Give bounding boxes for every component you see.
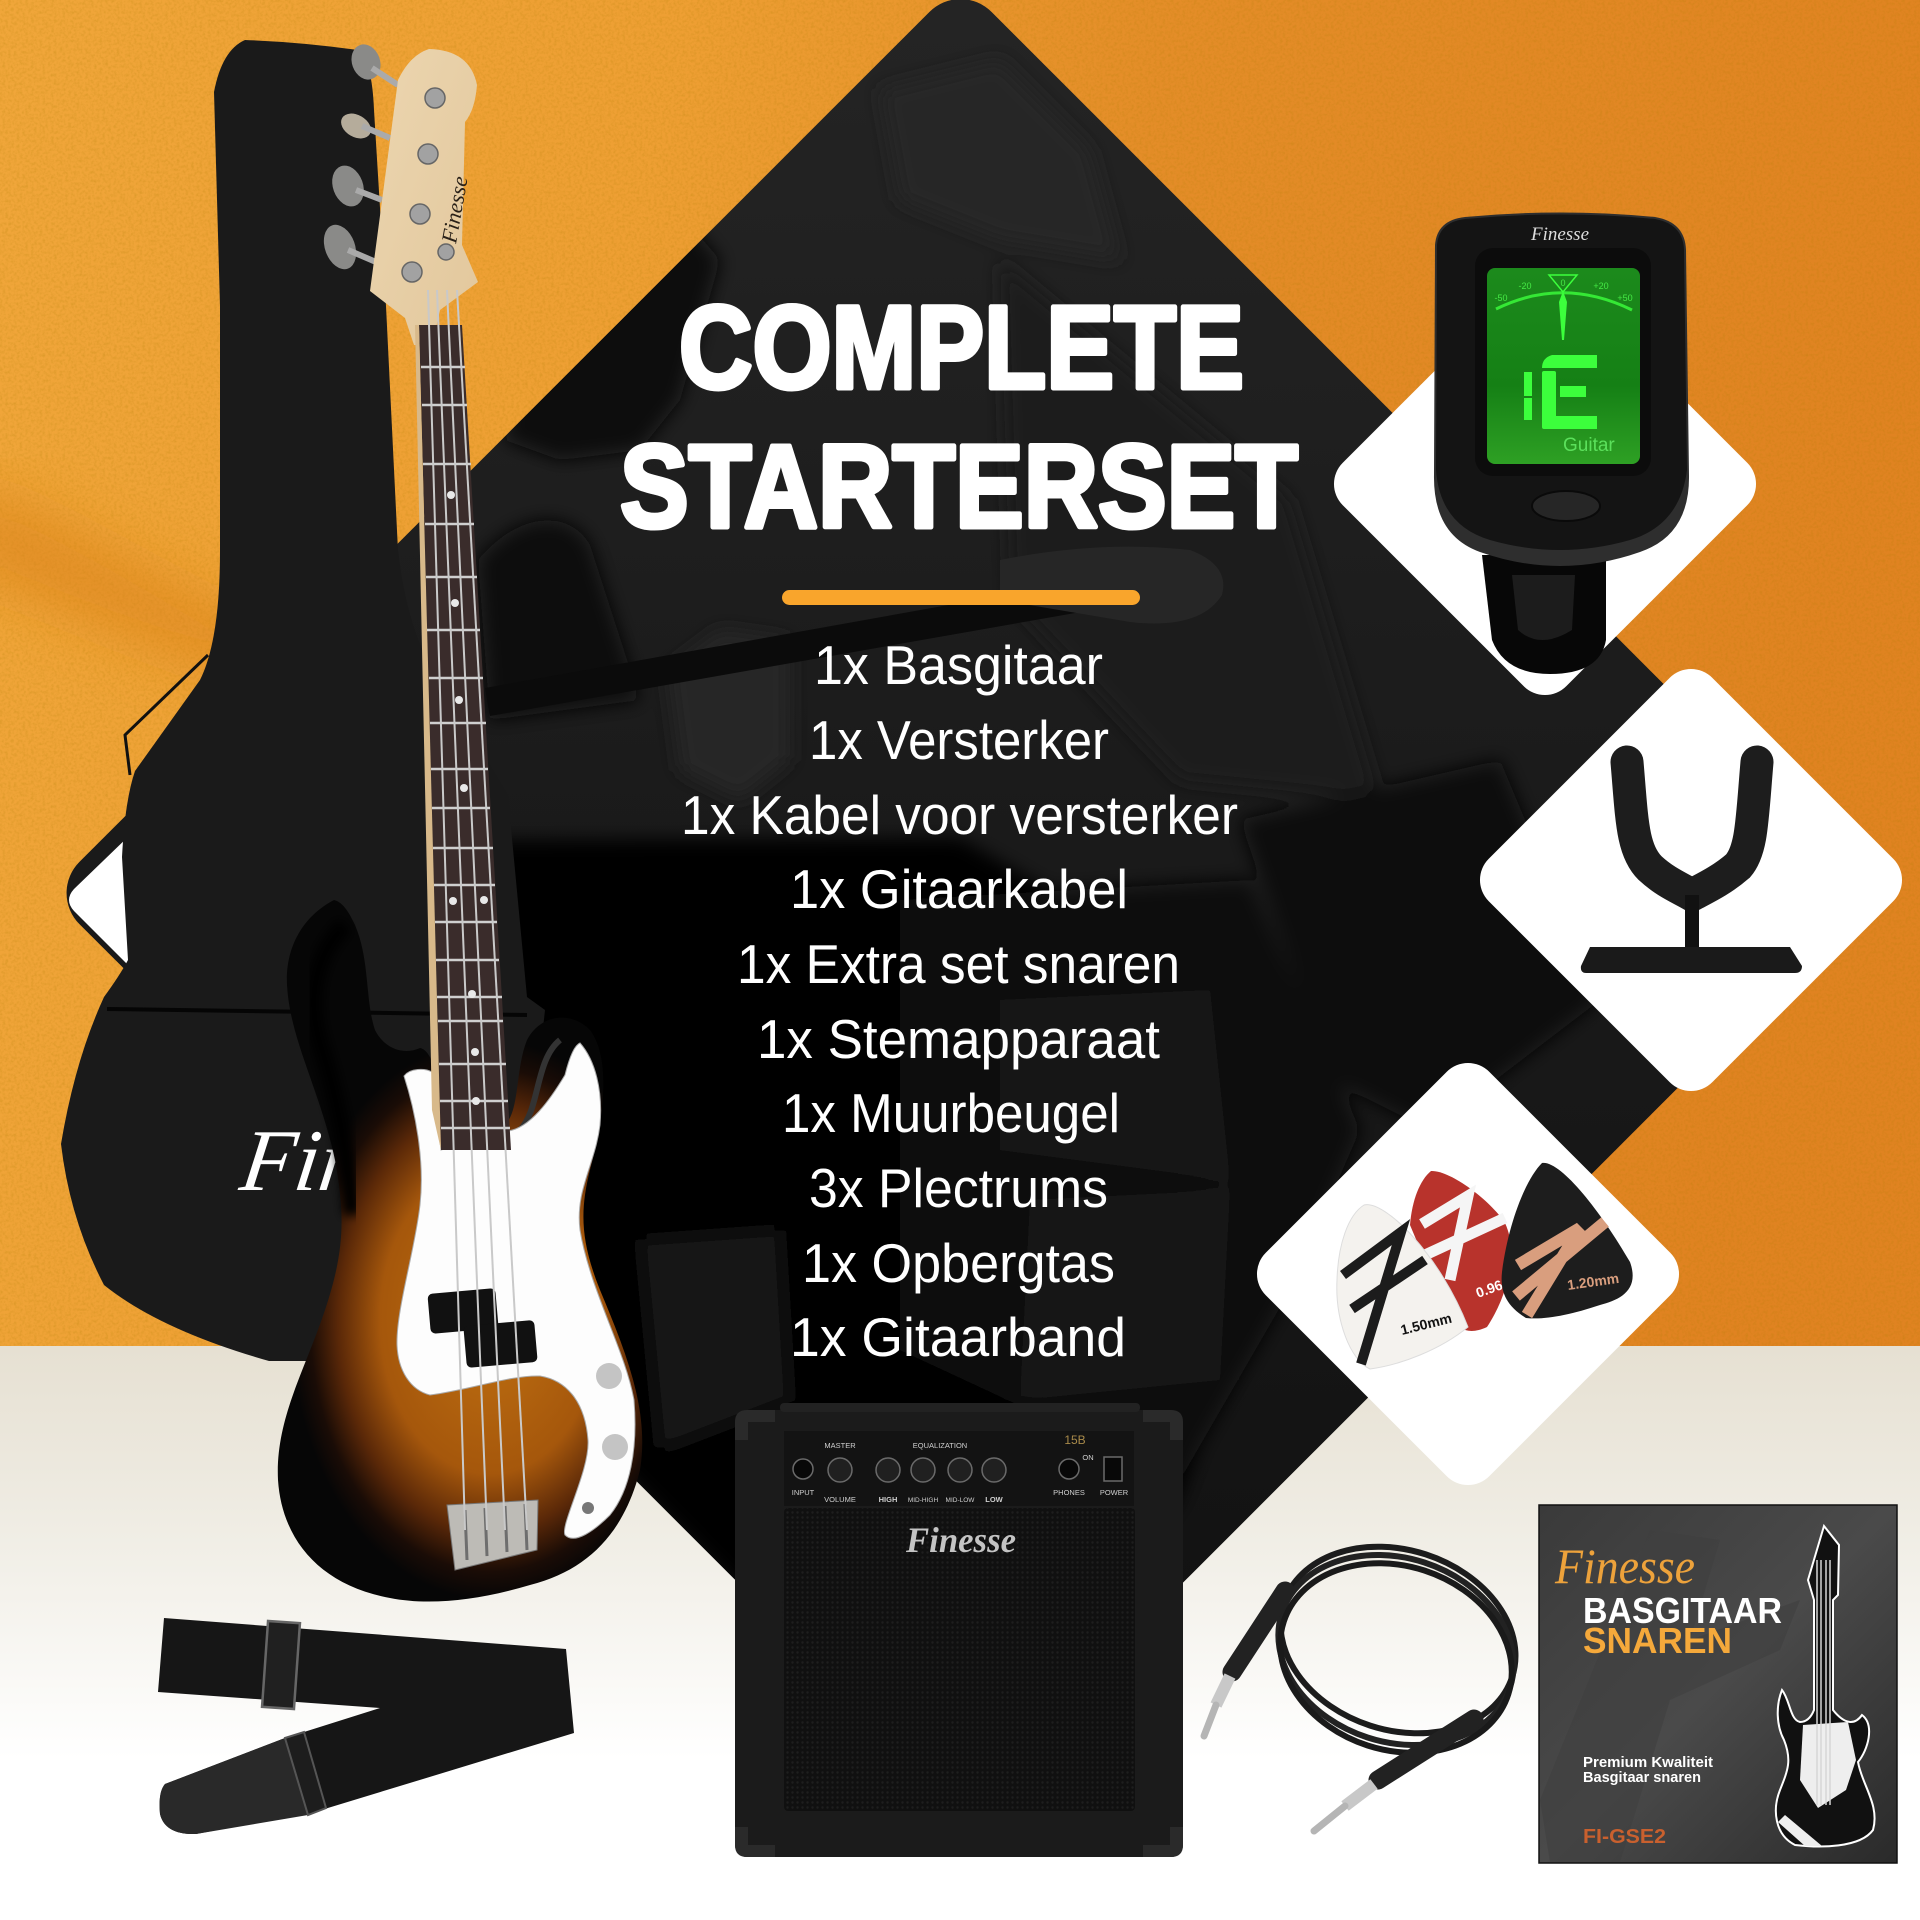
package heading: SNAREN	[1583, 1620, 1732, 1661]
tuner button	[1532, 491, 1600, 521]
icon: clip-on tuner: -50	[1494, 293, 1508, 303]
panel: black diamond with guitarist photo	[66, 0, 1678, 1582]
package description: Premium Kwaliteit	[1583, 1755, 1713, 1771]
tuner logo: Finesse	[1530, 224, 1589, 245]
icon: bass guitar	[278, 40, 642, 1602]
amp logo: Finesse	[905, 1520, 1016, 1560]
tuner note display	[1524, 355, 1597, 429]
amp labels: ON	[1082, 1453, 1094, 1462]
red pick	[1410, 1171, 1511, 1331]
icon: amplifier	[735, 1403, 1183, 1857]
panel: tuner diamond	[1322, 261, 1768, 707]
text block: contents list: 1x Basgitaar	[814, 634, 1103, 696]
tuner clip	[1482, 555, 1606, 674]
amp knobs	[793, 1457, 1122, 1482]
amp labels	[792, 1433, 1129, 1504]
amp labels: EQUALIZATION	[913, 1441, 967, 1450]
text block: contents list: 1x Opbergtas	[802, 1232, 1115, 1294]
text block: contents list: 1x Muurbeugel	[782, 1082, 1120, 1144]
bass neck	[419, 325, 511, 1150]
icon: clip-on tuner: -20	[1518, 281, 1532, 291]
icon: clip-on tuner	[1434, 212, 1689, 674]
title: COMPLETE	[679, 282, 1244, 414]
package logo: Finesse	[1554, 1538, 1695, 1594]
icon: bass guitar: Finesse	[436, 174, 473, 246]
icon: clip-on tuner: 0	[1560, 278, 1566, 288]
text block: contents list	[681, 634, 1238, 1368]
text block: contents list: 1x Extra set snaren	[737, 933, 1180, 995]
panel: strings package	[1539, 1505, 1897, 1863]
icon: guitar strap	[158, 1618, 574, 1834]
white pick: 1.50mm	[1399, 1310, 1453, 1338]
icon: gig bag: Fin	[234, 1112, 371, 1210]
amp labels: VOLUME	[824, 1495, 856, 1504]
tuner gauge	[1496, 293, 1632, 310]
icon: guitar picks	[1337, 1163, 1633, 1369]
panel: wall mount diamond	[1468, 657, 1914, 1103]
text block: contents list: 1x Gitaarkabel	[790, 858, 1128, 920]
amp labels: MID-HIGH	[908, 1497, 938, 1504]
amp labels: MASTER	[824, 1441, 856, 1450]
amp labels: HIGH	[879, 1495, 897, 1504]
package heading: BASGITAAR	[1583, 1590, 1782, 1631]
bass strings	[428, 290, 527, 1530]
package description	[1583, 1755, 1713, 1786]
amp labels: MID-LOW	[946, 1497, 975, 1504]
tuner screen	[1487, 268, 1640, 464]
tuner body	[1434, 212, 1689, 566]
bass headstock	[370, 49, 478, 345]
icon: wall mount	[1581, 762, 1802, 973]
panel: picks diamond	[1245, 1051, 1691, 1497]
bass pickups	[427, 1288, 538, 1368]
amp labels: POWER	[1100, 1488, 1129, 1497]
icon: clip-on tuner: +20	[1593, 281, 1609, 291]
tuner label: Guitar	[1563, 435, 1615, 456]
package code: FI-GSE2	[1583, 1826, 1666, 1848]
bass bridge	[447, 1500, 538, 1570]
package description: Basgitaar snaren	[1583, 1770, 1701, 1786]
amp labels: PHONES	[1053, 1488, 1085, 1497]
amp labels: INPUT	[792, 1488, 815, 1497]
bass tuning pegs	[318, 40, 398, 274]
panel: hidden left diamond	[69, 835, 130, 967]
amp speaker grille	[784, 1508, 1135, 1811]
text block: contents list: 1x Gitaarband	[790, 1306, 1126, 1368]
amp labels: LOW	[985, 1495, 1004, 1504]
amp control panel	[784, 1431, 1134, 1506]
red pick: 0.96	[1474, 1276, 1505, 1301]
bass body	[278, 900, 642, 1602]
bass knobs and jack	[582, 1363, 628, 1514]
text block: contents list: 3x Plectrums	[809, 1157, 1108, 1219]
divider bar	[782, 590, 1140, 605]
text block: contents list: 1x Stemapparaat	[757, 1008, 1160, 1070]
title: STARTERSET	[620, 421, 1298, 553]
icon: gig bag	[61, 40, 545, 1361]
icon: clip-on tuner: +50	[1617, 293, 1633, 303]
icon: instrument cable	[1204, 1517, 1540, 1831]
package heading	[1583, 1590, 1782, 1661]
white pick	[1337, 1205, 1468, 1369]
text block: contents list: 1x Versterker	[809, 709, 1109, 771]
black pick: 1.20mm	[1566, 1270, 1620, 1293]
amp labels: 15B	[1064, 1433, 1086, 1447]
text block: contents list: 1x Kabel voor versterker	[681, 784, 1238, 846]
title	[620, 282, 1298, 553]
black pick	[1502, 1163, 1633, 1318]
package guitar drawing	[1776, 1526, 1875, 1846]
